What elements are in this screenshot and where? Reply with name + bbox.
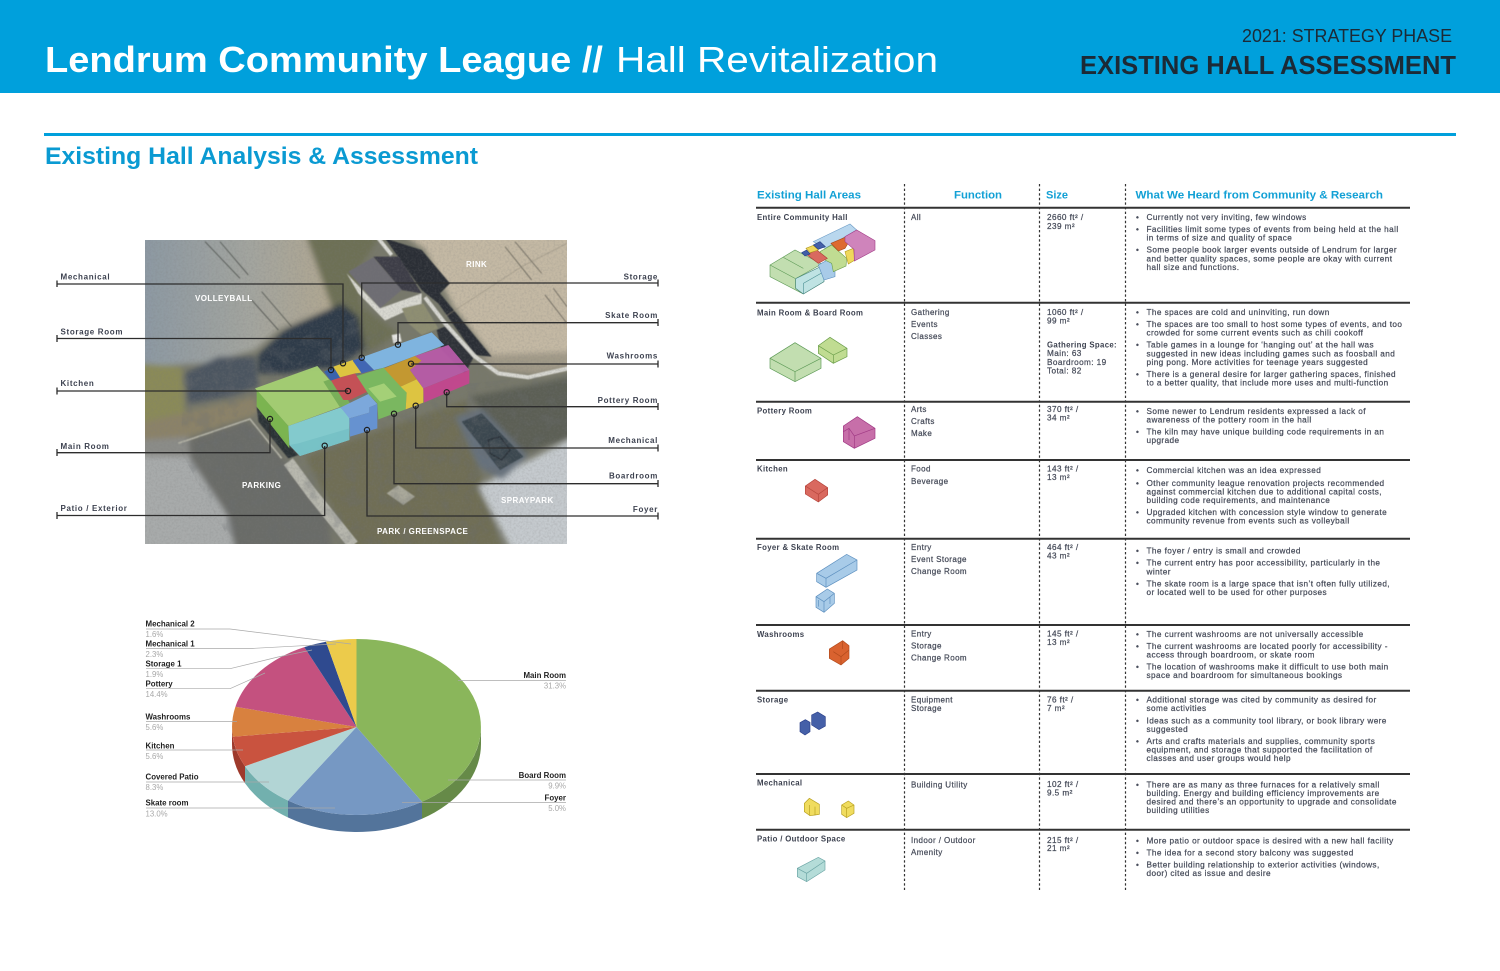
callout: foyer: Foyer — [633, 505, 658, 514]
community comments: suggested — [1146, 725, 1188, 734]
callout: main room: Main Room — [60, 442, 110, 451]
community comments: Some newer to Lendrum residents expressed a lack of — [1146, 407, 1366, 416]
row: main room and board room: Boardroom: 19 — [1047, 358, 1107, 367]
row: patio and outdoor space — [757, 834, 1394, 882]
callout: storage room: Storage Room — [60, 328, 123, 336]
community comments: • — [1136, 246, 1139, 255]
community comments: • — [1136, 780, 1139, 790]
row: washrooms: Entry — [911, 630, 932, 638]
row: pottery room: Make — [911, 429, 932, 438]
community comments: Table games in a lounge for ‘hanging out’ at the hall was — [1146, 341, 1374, 350]
callout: skate room: Skate Room — [605, 311, 658, 320]
community comments: Currently not very inviting, few windows — [1146, 213, 1307, 222]
community comments: equipment, and storage that supported the facilitation of — [1146, 746, 1373, 754]
callout: kitchen: Kitchen — [60, 379, 94, 388]
pie legend labels: Covered Patio — [146, 772, 199, 782]
community comments: The current washrooms are not universally accessible — [1146, 630, 1364, 639]
row: foyer and skate room: Foyer & Skate Room — [757, 543, 839, 552]
aerial photo — [138, 233, 575, 550]
pie legend labels: 14.4% — [146, 690, 168, 699]
colored building massing — [255, 332, 469, 456]
pie legend labels: Washrooms — [146, 712, 191, 722]
community comments: • — [1136, 696, 1139, 704]
community comments: to a better quality, that include more uses and multi-function — [1146, 379, 1389, 388]
callout: mechanical 2 — [413, 403, 658, 452]
community comments: • — [1136, 558, 1139, 568]
icon: whole hall massing — [770, 224, 875, 294]
community comments: building. Energy and building efficiency improvements are — [1146, 789, 1380, 798]
row: main room and board room: Gathering Space: — [1047, 340, 1117, 350]
row: patio and outdoor space: Indoor / Outdoor — [911, 836, 976, 845]
community comments: The current washrooms are located poorly for accessibility - — [1146, 642, 1388, 651]
row: pottery room: Pottery Room — [757, 406, 812, 416]
community comments: The kiln may have unique building code requirements in an — [1146, 428, 1384, 436]
row: kitchen: 143 ft² / — [1047, 464, 1079, 474]
community comments: Other community league renovation projects recommended — [1146, 479, 1384, 488]
community comments — [1136, 308, 1402, 388]
community comments: crowded for some current events such as chili cookoff — [1146, 329, 1364, 338]
table headers: What We Heard from Community & Research — [1136, 190, 1383, 202]
table headers — [757, 190, 1383, 202]
community comments: Ideas such as a community tool library, or book library were — [1146, 716, 1387, 726]
community comments: • — [1136, 836, 1139, 846]
site labels: RINK — [466, 260, 487, 269]
community comments: • — [1136, 466, 1139, 475]
row: storage: Storage — [757, 696, 789, 704]
row: foyer and skate room: Event Storage — [911, 555, 967, 564]
community comments: More patio or outdoor space is desired with a new hall facility — [1146, 836, 1394, 846]
pie legend labels — [146, 620, 566, 818]
row: mechanical: Mechanical — [757, 778, 802, 788]
table grid — [756, 184, 1410, 890]
community comments: • — [1136, 662, 1139, 672]
community comments: There is a general desire for larger gathering spaces, finished — [1146, 370, 1396, 379]
row: pottery room: 370 ft² / — [1047, 405, 1079, 414]
callout: foyer — [364, 427, 658, 520]
community comments: community revenue from events such as volleyball — [1146, 516, 1350, 526]
callout: kitchen — [57, 379, 351, 394]
pie legend labels: Skate room — [146, 798, 188, 808]
row: main room and board room: Total: 82 — [1047, 366, 1082, 376]
icon: storage — [800, 712, 825, 735]
aerial site diagram — [57, 233, 658, 550]
pie legend labels: Kitchen — [146, 742, 175, 750]
phase heading — [1080, 26, 1456, 80]
community comments: • — [1136, 308, 1139, 317]
community comments: • — [1136, 737, 1139, 746]
community comments: Some people book larger events outside of Lendrum for larger — [1146, 246, 1397, 255]
community comments — [1136, 546, 1390, 597]
callout: mechanical 2: Mechanical — [608, 436, 658, 445]
row: washrooms: 13 m² — [1047, 638, 1070, 647]
community comments: awareness of the pottery room in the hall — [1146, 416, 1312, 424]
community comments: The current entry has poor accessibility, particularly in the — [1146, 558, 1380, 568]
row: foyer and skate room: 464 ft² / — [1047, 543, 1079, 552]
community comments: space and boardroom for simultaneous bookings — [1146, 671, 1342, 680]
site labels: PARKING — [242, 481, 281, 490]
phase heading: EXISTING HALL ASSESSMENT — [1080, 50, 1456, 80]
row: pottery room: 34 m² — [1047, 414, 1070, 422]
row: main room and board room: 1060 ft² / — [1047, 308, 1084, 317]
community comments: winter — [1146, 568, 1171, 576]
row: main room and board room: 99 m² — [1047, 316, 1070, 326]
callout: boardroom: Boardroom — [609, 472, 658, 480]
community comments: • — [1136, 716, 1139, 726]
row: foyer and skate room: Change Room — [911, 567, 967, 576]
pie legend labels: 8.3% — [146, 783, 163, 792]
row: washrooms: Change Room — [911, 654, 967, 663]
row: entire community hall: 2660 ft² / — [1047, 213, 1084, 222]
community comments: The spaces are cold and uninviting, run down — [1146, 308, 1330, 317]
community comments: • — [1136, 225, 1139, 234]
title: Hall Revitalization — [616, 39, 938, 80]
row: foyer and skate room: 43 m² — [1047, 552, 1070, 560]
community comments: The idea for a second story balcony was suggested — [1146, 848, 1354, 858]
row: kitchen: 13 m² — [1047, 473, 1070, 482]
pie slices — [232, 639, 481, 815]
community comments: • — [1136, 642, 1139, 651]
row: main room and board room: Gathering — [911, 308, 950, 317]
row: main room and board room: Events — [911, 320, 938, 329]
row: washrooms — [757, 630, 1389, 680]
row: main room and board room: Main Room & Board Room — [757, 308, 863, 318]
community comments: Additional storage was cited by community as desired for — [1146, 696, 1377, 704]
icon: patio — [797, 857, 825, 882]
community comments: suggested in new ideas including games such as foosball and — [1146, 349, 1395, 358]
row: entire community hall: Entire Community Hall — [757, 213, 848, 222]
pie sides — [232, 727, 481, 832]
callout: storage room — [57, 328, 334, 373]
community comments: • — [1136, 546, 1139, 556]
row: washrooms: 145 ft² / — [1047, 630, 1079, 639]
community comments: upgrade — [1146, 436, 1180, 445]
community comments: The location of washrooms make it difficult to use both main — [1146, 662, 1389, 672]
community comments: building code requirements, and maintenance — [1146, 496, 1330, 505]
row: kitchen: Kitchen — [757, 464, 788, 474]
callout: skate room — [395, 311, 658, 347]
pie legend labels: 1.6% — [146, 630, 163, 639]
callout: pottery room: Pottery Room — [598, 396, 658, 405]
community comments: building utilities — [1146, 806, 1210, 815]
pie legend labels: Board Room — [519, 771, 566, 780]
callout: patio — [57, 443, 327, 519]
row: pottery room: Crafts — [911, 417, 935, 426]
callout: washrooms — [408, 352, 658, 368]
community comments: Facilities limit some types of events from being held at the hall — [1146, 225, 1399, 234]
community comments: Better building relationship to exterior activities (windows, — [1146, 860, 1380, 870]
row: pottery room: Arts — [911, 405, 927, 414]
row: storage: Storage — [911, 704, 942, 713]
callout: storage: Storage — [624, 272, 658, 282]
row: pottery room — [757, 405, 1384, 448]
callout: patio: Patio / Exterior — [60, 504, 128, 513]
table headers: Function — [954, 190, 1002, 202]
callout: mechanical: Mechanical — [60, 272, 110, 282]
row: mechanical: 102 ft² / — [1047, 780, 1079, 789]
community comments: • — [1136, 848, 1139, 858]
row: foyer and skate room — [757, 543, 1390, 612]
site labels: VOLLEYBALL — [195, 294, 253, 303]
header band — [0, 0, 1500, 93]
community comments: Arts and crafts materials and supplies, community sports — [1146, 737, 1375, 746]
community comments: classes and user groups would help — [1146, 754, 1291, 763]
community comments: and better quality spaces, some people are okay with current — [1146, 254, 1393, 263]
title: Lendrum Community League // — [45, 39, 603, 80]
row: storage: 76 ft² / — [1047, 696, 1074, 704]
callout: boardroom — [391, 411, 658, 487]
pie legend labels: Storage 1 — [146, 660, 182, 668]
callout: washrooms: Washrooms — [607, 352, 658, 360]
row: washrooms: Washrooms — [757, 630, 805, 639]
row: kitchen — [757, 464, 1387, 526]
community comments: Commercial kitchen was an idea expressed — [1146, 466, 1321, 475]
community comments: • — [1136, 341, 1139, 350]
pie legend labels: Main Room — [523, 671, 566, 680]
table headers: Existing Hall Areas — [757, 190, 861, 202]
pie legend labels: Foyer — [544, 794, 566, 802]
table: hall areas — [756, 184, 1410, 890]
pie legend labels: Mechanical 1 — [146, 640, 195, 648]
pie legend labels: Mechanical 2 — [146, 620, 195, 628]
pie legend labels: 13.0% — [146, 810, 168, 818]
phase heading: 2021: STRATEGY PHASE — [1242, 26, 1452, 46]
community comments: • — [1136, 320, 1139, 329]
community comments: The spaces are too small to host some types of events, and too — [1146, 320, 1402, 329]
row: main room and board room: Main: 63 — [1047, 349, 1082, 358]
community comments: • — [1136, 860, 1139, 870]
pie legend labels: 31.3% — [544, 682, 566, 690]
community comments: The skate room is a large space that isn’t often fully utilized, — [1146, 580, 1390, 588]
pie chart: area share — [146, 620, 566, 832]
community comments — [1136, 780, 1397, 815]
community comments — [1136, 836, 1394, 878]
community comments: in terms of size and quality of space — [1146, 234, 1292, 243]
row: storage: 7 m² — [1047, 704, 1065, 713]
community comments — [1136, 213, 1399, 272]
community comments: desired and there’s an opportunity to upgrade and consolidate — [1146, 798, 1397, 806]
row: entire community hall: All — [911, 213, 921, 222]
row: foyer and skate room: Entry — [911, 543, 932, 552]
row: patio and outdoor space: 215 ft² / — [1047, 836, 1079, 845]
community comments: or located well to be used for other purposes — [1146, 588, 1327, 597]
community comments: • — [1136, 370, 1139, 379]
pie legend labels: 5.6% — [146, 723, 163, 732]
row: storage — [757, 696, 1387, 763]
community comments: access through boardroom, or skate room — [1146, 650, 1315, 660]
row: entire community hall — [757, 213, 1399, 294]
table headers: Size — [1046, 190, 1068, 202]
community comments — [1136, 407, 1384, 445]
row: main room and board room: Classes — [911, 332, 942, 341]
community comments: • — [1136, 479, 1139, 488]
row: mechanical: Building Utility — [911, 780, 968, 790]
row: main room and board room — [757, 308, 1402, 388]
row: patio and outdoor space: Patio / Outdoor Space — [757, 834, 846, 844]
icon: washrooms — [829, 641, 849, 665]
callout: main room — [57, 416, 273, 456]
row: kitchen: Beverage — [911, 477, 949, 486]
row: washrooms: Storage — [911, 642, 942, 651]
pie legend labels: 5.0% — [548, 804, 566, 813]
row: storage: Equipment — [911, 696, 953, 704]
icon: foyer and skate room — [816, 554, 857, 612]
community comments: • — [1136, 213, 1139, 222]
community comments: There are as many as three furnaces for a relatively small — [1146, 780, 1380, 790]
community comments — [1136, 696, 1387, 763]
row: patio and outdoor space: 21 m² — [1047, 844, 1070, 853]
icon: pottery room — [843, 417, 875, 448]
site labels: SPRAYPARK — [501, 496, 554, 505]
title — [45, 39, 938, 80]
community comments: against commercial kitchen due to additional capital costs, — [1146, 488, 1382, 496]
community comments: ping pong. More activities for teenage years suggested — [1146, 358, 1368, 367]
site labels — [195, 260, 554, 536]
community comments: • — [1136, 407, 1139, 416]
callout: mechanical — [57, 272, 346, 366]
community comments: Upgraded kitchen with concession style window to generate — [1146, 508, 1387, 517]
community comments: hall size and functions. — [1146, 263, 1239, 272]
community comments: The foyer / entry is small and crowded — [1146, 546, 1301, 556]
row: mechanical — [757, 778, 1397, 818]
pie legend labels: 5.6% — [146, 752, 163, 761]
pie legend labels: 9.9% — [548, 782, 566, 790]
row: kitchen: Food — [911, 464, 931, 474]
community comments: door) cited as issue and desire — [1146, 869, 1271, 878]
row: entire community hall: 239 m² — [1047, 222, 1075, 231]
section heading: Existing Hall Analysis & Assessment — [45, 143, 478, 170]
community comments — [1136, 630, 1389, 680]
community comments — [1136, 466, 1387, 526]
row: mechanical: 9.5 m² — [1047, 788, 1073, 798]
community comments: some activities — [1146, 704, 1206, 713]
pie legend labels: 1.9% — [146, 670, 163, 679]
community comments: • — [1136, 580, 1139, 588]
icon: main room and board room — [770, 337, 847, 382]
community comments: • — [1136, 428, 1139, 436]
row: patio and outdoor space: Amenity — [911, 848, 943, 857]
callout: storage — [359, 272, 658, 360]
icon: kitchen — [805, 479, 828, 502]
pie legend labels: 2.3% — [146, 650, 163, 659]
callout: pottery room — [444, 390, 658, 410]
icon: mechanical — [804, 798, 854, 818]
community comments: • — [1136, 630, 1139, 639]
site labels: PARK / GREENSPACE — [377, 527, 469, 536]
pie legend labels: Pottery — [146, 680, 173, 688]
community comments: • — [1136, 508, 1139, 517]
